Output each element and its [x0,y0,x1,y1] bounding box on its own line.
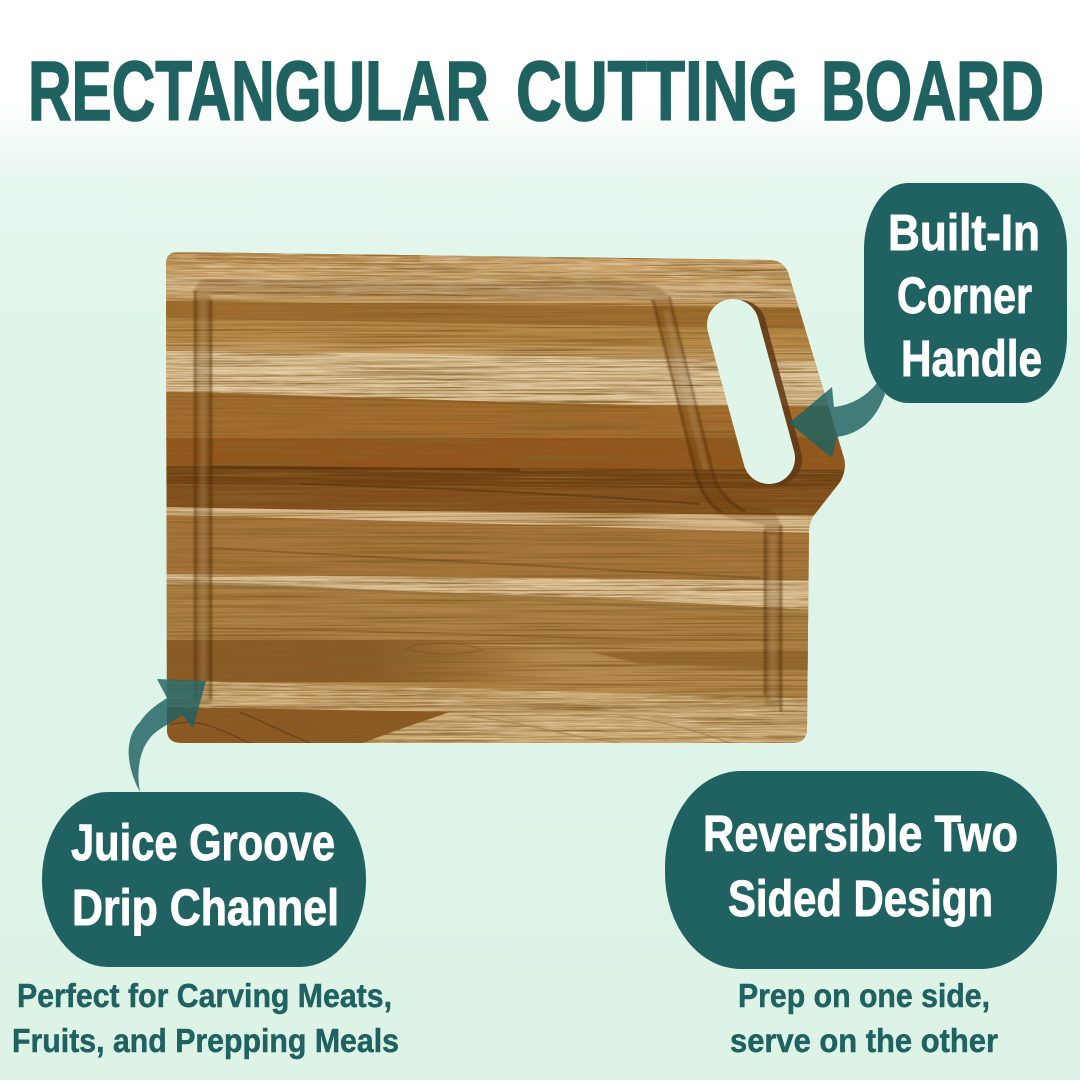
caption: juice groove uses: Perfect for Carving Meats, [17,977,392,1014]
title: RECTANGULAR [28,44,489,138]
handle cutout opening [733,325,769,458]
caption: reversible uses: serve on the other [730,1022,998,1059]
callout bubble: built-in corner handle [864,183,1067,403]
caption: reversible uses: Prep on one side, [738,977,990,1014]
callout bubble: built-in corner handle: Built-In [888,204,1040,261]
juice groove channel [195,287,781,712]
caption: juice groove uses: Fruits, and Prepping Meals [12,1022,399,1059]
callout bubble: built-in corner handle: Corner [897,267,1032,324]
title [28,44,1044,138]
arrow: to corner handle [789,383,885,458]
callout bubble: reversible two sided design: Sided Design [728,870,993,927]
arrow: to juice groove [129,679,206,792]
handle cutout bevel [740,326,776,459]
callout bubble: juice groove drip channel: Drip Channel [72,879,339,936]
cutting board photo [160,245,860,750]
callout bubble: reversible two sided design [665,771,1057,969]
callout bubble: built-in corner handle: Handle [901,330,1042,387]
callout bubble: juice groove drip channel [42,792,366,967]
callout bubble: reversible two sided design: Reversible Two [703,805,1018,862]
callout bubble: juice groove drip channel: Juice Groove [71,814,335,871]
caption: reversible uses [730,977,998,1059]
caption: juice groove uses [12,977,399,1059]
title: CUTTING [516,44,798,138]
